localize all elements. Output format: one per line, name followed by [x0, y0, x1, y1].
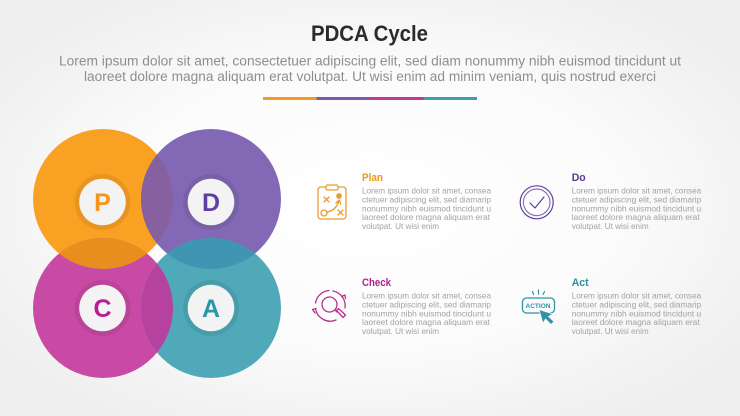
text block: Act: volutpat. Ut wisi enim — [572, 326, 649, 336]
overlap: C and A — [141, 264, 173, 352]
subtitle text: laoreet dolore magna aliquam erat volutpat. Ut wisi enim ad minim veniam, quis nostrud exerci — [84, 69, 656, 84]
badge: P: P — [94, 189, 111, 217]
text block: Do: volutpat. Ut wisi enim — [572, 221, 649, 231]
badge: A — [183, 280, 239, 336]
overlap: P and D — [141, 154, 173, 244]
text block: Do — [572, 172, 701, 231]
text block: Check: laoreet dolore magna aliquam erat — [362, 317, 491, 327]
circle: D — [141, 129, 281, 269]
badge: C — [74, 280, 130, 336]
circle: P — [33, 129, 173, 269]
text block: Act: nonummy nibh euismod tincidunt u — [572, 308, 701, 318]
badge: D — [183, 174, 239, 230]
text block: Do: laoreet dolore magna aliquam erat — [572, 212, 700, 222]
icon: clipboard strategy plan — [318, 185, 346, 219]
icon: action button with cursor — [522, 290, 554, 324]
badge: D: D — [202, 189, 220, 217]
icon: magnifier with cycle arrows — [312, 290, 346, 321]
text block: Do: nonummy nibh euismod tincidunt u — [572, 204, 701, 214]
text block: Check: Lorem ipsum dolor sit amet, consea — [362, 290, 491, 300]
circle: C — [33, 238, 173, 378]
text block: Check: ctetuer adipiscing elit, sed diamarip — [362, 300, 491, 310]
icon: action button with cursor: ACTION — [526, 303, 551, 310]
text block: Plan: Plan — [362, 172, 383, 184]
subtitle text — [59, 54, 681, 84]
text block: Check: volutpat. Ut wisi enim — [362, 326, 439, 336]
text block: Do: ctetuer adipiscing elit, sed diamarip — [572, 194, 701, 204]
overlap: P and C — [59, 238, 147, 269]
text block: Check — [362, 277, 491, 336]
badge: C: C — [93, 295, 112, 323]
text block: Act: ctetuer adipiscing elit, sed diamarip — [572, 300, 701, 310]
text block: Act — [572, 277, 701, 336]
overlap: D and A — [167, 238, 255, 269]
badge: P — [74, 174, 130, 230]
text block: Plan — [362, 172, 491, 231]
text block: Check: nonummy nibh euismod tincidunt u — [362, 308, 491, 318]
title underline in four colours — [263, 97, 477, 100]
text block: Act: Lorem ipsum dolor sit amet, consea — [572, 290, 701, 300]
text block: Act: laoreet dolore magna aliquam erat — [572, 317, 700, 327]
text block: Plan: Lorem ipsum dolor sit amet, consea — [362, 186, 491, 196]
title: PDCA Cycle — [311, 21, 428, 46]
text block: Check: Check — [362, 277, 392, 289]
circle: A — [141, 238, 281, 378]
text block: Act: Act — [572, 277, 589, 289]
text block: Plan: volutpat. Ut wisi enim — [362, 221, 439, 231]
icon: check mark badge — [520, 186, 553, 219]
badge: A: A — [202, 295, 220, 323]
text block: Plan: laoreet dolore magna aliquam erat — [362, 212, 491, 222]
subtitle text: Lorem ipsum dolor sit amet, consectetuer adipiscing elit, sed diam nonummy nibh euismod tincidunt ut — [59, 54, 681, 68]
text block: Do: Lorem ipsum dolor sit amet, consea — [572, 186, 701, 196]
text block: Plan: nonummy nibh euismod tincidunt u — [362, 204, 491, 214]
text block: Do: Do — [572, 172, 586, 184]
text block: Plan: ctetuer adipiscing elit, sed diamarip — [362, 194, 491, 204]
overlapping circle diagram — [33, 129, 281, 378]
